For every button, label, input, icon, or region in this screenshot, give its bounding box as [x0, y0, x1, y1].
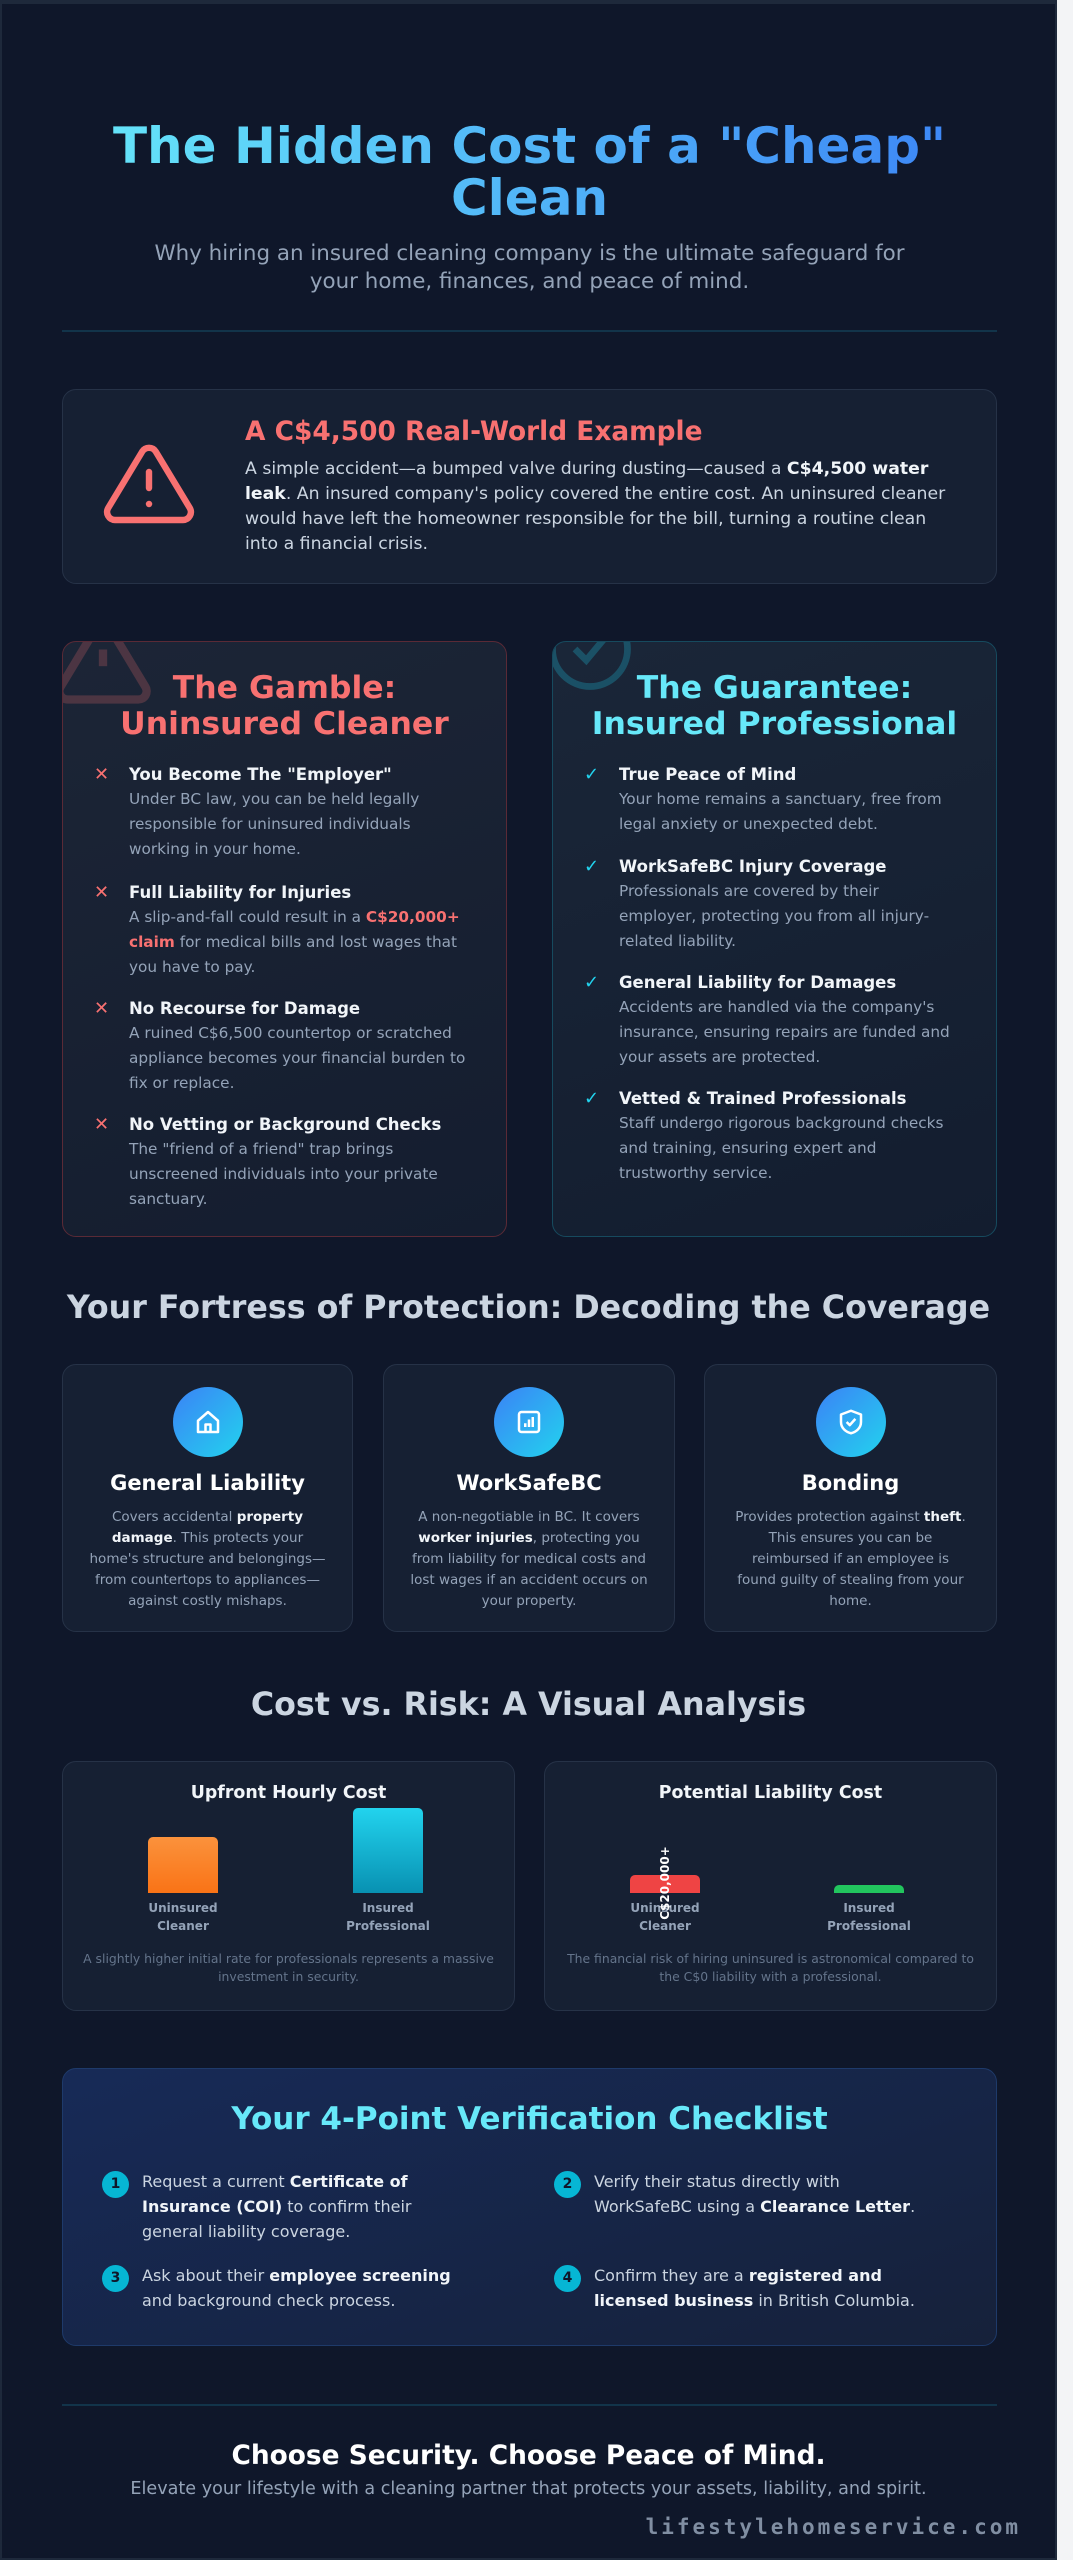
panel: general liability: damage. This protects your	[112, 1530, 303, 1546]
item: The "friend of a friend" trap brings	[129, 1140, 393, 1158]
panel: checklist: 1	[111, 2176, 120, 2192]
item: sanctuary.	[129, 1190, 208, 1208]
item: unscreened individuals into your private	[129, 1165, 438, 1183]
item	[584, 1088, 943, 1182]
panel: bonding: reimbursed if an employee is	[752, 1551, 949, 1567]
item: A slip-and-fall could result in a C$20,000+	[129, 908, 460, 926]
item: No Recourse for Damage	[129, 999, 360, 1018]
item	[584, 764, 942, 833]
panel: bonding: found guilty of stealing from your	[737, 1572, 964, 1588]
item: Professionals are covered by their	[619, 882, 879, 900]
item	[94, 1114, 441, 1208]
panel: checklist: 3	[111, 2270, 120, 2286]
heading	[592, 670, 957, 742]
value label: C$20,000+	[658, 1846, 672, 1920]
item: claim for medical bills and lost wages that	[129, 933, 457, 951]
section heading: fortress: Your Fortress of Protection: Decoding the Coverage	[67, 1290, 990, 1326]
item: Under BC law, you can be held legally	[129, 790, 419, 808]
icon: faded warning	[63, 642, 151, 704]
panel: gamble	[62, 641, 507, 1237]
panel: guarantee	[552, 641, 997, 1237]
bar: uninsured	[148, 1837, 218, 1893]
panel: checklist: 4	[563, 2270, 572, 2286]
item: responsible for uninsured individuals	[129, 815, 411, 833]
panel: worksafebc: WorkSafeBC	[456, 1471, 602, 1495]
item	[94, 998, 465, 1092]
item: you have to pay.	[129, 958, 255, 976]
panel: gamble: ✕	[94, 998, 109, 1019]
text block: leak. An insured company's policy covered the entire cost. An uninsured cleaner	[245, 484, 945, 504]
item	[94, 764, 419, 858]
panel: guarantee: ✓	[584, 1088, 599, 1109]
panel: worksafebc: from liability for medical costs and	[412, 1551, 646, 1567]
item: No Vetting or Background Checks	[129, 1115, 441, 1134]
chart: upfront hourly cost	[62, 1761, 515, 2011]
icon: chart	[494, 1387, 564, 1457]
icon: warning	[104, 444, 194, 524]
item: employer, protecting you from all injury-	[619, 907, 929, 925]
panel: gamble: ✕	[94, 882, 109, 903]
panel: general liability	[62, 1364, 353, 1632]
panel: worksafebc: lost wages if an accident occurs on	[410, 1572, 648, 1588]
item 4: Confirm they are a registered and	[594, 2266, 882, 2285]
footer heading: Choose Security. Choose Peace of Mind.	[231, 2440, 826, 2471]
footer text: Elevate your lifestyle with a cleaning partner that protects your assets, liability, and spirit.	[130, 2479, 927, 2499]
item: General Liability for Damages	[619, 973, 896, 992]
title: The Hidden Cost of a "Cheap"	[113, 117, 946, 175]
item 2: WorkSafeBC using a Clearance Letter.	[594, 2197, 915, 2216]
item: working in your home.	[129, 840, 301, 858]
item: appliance becomes your financial burden to	[129, 1049, 465, 1067]
text block: A simple accident—a bumped valve during dusting—caused a C$4,500 water	[245, 459, 928, 479]
item: WorkSafeBC Injury Coverage	[619, 857, 886, 876]
item: A ruined C$6,500 countertop or scratched	[129, 1024, 452, 1042]
chart: potential liability cost	[544, 1761, 997, 2011]
item: Staff undergo rigorous background checks	[619, 1114, 943, 1132]
item 1: Request a current Certificate of	[142, 2172, 408, 2191]
heading: The Gamble:	[173, 670, 396, 706]
panel: general liability: home's structure and belongings—	[90, 1551, 325, 1567]
heading: Insured Professional	[592, 706, 957, 742]
item: Your home remains a sanctuary, free from	[619, 790, 942, 808]
panel: gamble: ✕	[94, 764, 109, 785]
panel: real-world example	[62, 389, 997, 584]
item 4	[554, 2265, 915, 2310]
item 2	[554, 2171, 915, 2216]
chart: upfront hourly cost: Insured Professional	[346, 1901, 430, 1933]
panel: general liability: Covers accidental property	[112, 1509, 303, 1525]
panel: checklist	[62, 2068, 997, 2346]
subtitle: Why hiring an insured cleaning company is the ultimate safeguard for	[155, 241, 904, 266]
item	[584, 856, 929, 950]
item 2: Verify their status directly with	[594, 2172, 840, 2191]
text block: into a financial crisis.	[245, 534, 428, 554]
chart: upfront hourly cost: Uninsured Cleaner	[148, 1901, 218, 1933]
item: You Become The "Employer"	[129, 765, 392, 784]
watermark: lifestylehomeservice.com	[646, 2515, 1021, 2539]
item: and training, ensuring expert and	[619, 1139, 876, 1157]
panel: gamble: ✕	[94, 1114, 109, 1135]
item: related liability.	[619, 932, 736, 950]
title: Clean	[451, 169, 608, 227]
panel: general liability: General Liability	[110, 1471, 305, 1495]
icon: shield	[816, 1387, 886, 1457]
text block: would have left the homeowner responsible for the bill, turning a routine clean	[245, 509, 926, 529]
chart: potential liability cost: Potential Liability Cost	[659, 1783, 882, 1803]
heading: Uninsured Cleaner	[120, 706, 449, 742]
item: Full Liability for Injuries	[129, 883, 351, 902]
heading: The Guarantee:	[637, 670, 912, 706]
item	[94, 882, 460, 976]
panel: bonding	[704, 1364, 997, 1632]
item 1	[102, 2171, 412, 2241]
text block	[245, 459, 946, 554]
panel: bonding: Provides protection against theft.	[735, 1509, 966, 1525]
panel: bonding: home.	[829, 1593, 872, 1609]
panel: worksafebc: your property.	[482, 1593, 576, 1609]
panel: worksafebc	[383, 1364, 675, 1632]
item: trustworthy service.	[619, 1164, 772, 1182]
subtitle	[155, 241, 905, 294]
chart: upfront hourly cost: A slightly higher initial rate for professionals represents a massive investment in security.	[83, 1951, 494, 1984]
item: insurance, ensuring repairs are funded and	[619, 1023, 950, 1041]
item: Accidents are handled via the company's	[619, 998, 934, 1016]
item	[584, 972, 950, 1066]
panel: bonding: Bonding	[802, 1471, 899, 1495]
item: Vetted & Trained Professionals	[619, 1089, 907, 1108]
item: True Peace of Mind	[619, 765, 796, 784]
heading: Your 4-Point Verification Checklist	[231, 2101, 828, 2137]
chart: potential liability cost: Insured Professional	[827, 1901, 911, 1933]
panel: worksafebc: A non-negotiable in BC. It covers	[418, 1509, 640, 1525]
section heading: cost vs risk: Cost vs. Risk: A Visual Analysis	[251, 1687, 806, 1723]
item: legal anxiety or unexpected debt.	[619, 815, 878, 833]
panel: guarantee: ✓	[584, 972, 599, 993]
item 1: Insurance (COI) to confirm their	[142, 2197, 411, 2216]
chart: upfront hourly cost: Upfront Hourly Cost	[191, 1783, 386, 1803]
panel: guarantee: ✓	[584, 764, 599, 785]
panel: bonding: This ensures you can be	[769, 1530, 932, 1546]
chart: potential liability cost: The financial risk of hiring uninsured is astronomical compared to the C$0 liability with a professional.	[567, 1951, 974, 1984]
title	[62, 120, 997, 224]
item 3: and background check process.	[142, 2291, 395, 2310]
item 3	[102, 2265, 451, 2310]
bar: insured	[353, 1808, 423, 1893]
heading	[120, 670, 449, 742]
panel: guarantee: ✓	[584, 856, 599, 877]
bar: uninsured	[630, 1875, 700, 1893]
item 1: general liability coverage.	[142, 2222, 350, 2241]
icon: faded check circle	[553, 642, 631, 690]
item: fix or replace.	[129, 1074, 234, 1092]
panel: general liability: from countertops to appliances—	[95, 1572, 320, 1588]
bar: insured	[834, 1885, 904, 1893]
panel: checklist: 2	[563, 2176, 572, 2192]
icon: house	[172, 1387, 242, 1457]
chart: potential liability cost: Uninsured Cleaner	[630, 1901, 700, 1933]
heading: A C$4,500 Real-World Example	[245, 416, 702, 447]
panel: general liability: against costly mishaps.	[128, 1593, 287, 1609]
subtitle: your home, finances, and peace of mind.	[310, 269, 749, 294]
item 4: licensed business in British Columbia.	[594, 2291, 915, 2310]
item: your assets are protected.	[619, 1048, 820, 1066]
panel: worksafebc: worker injuries, protecting you	[418, 1530, 640, 1546]
item 3: Ask about their employee screening	[142, 2266, 451, 2285]
